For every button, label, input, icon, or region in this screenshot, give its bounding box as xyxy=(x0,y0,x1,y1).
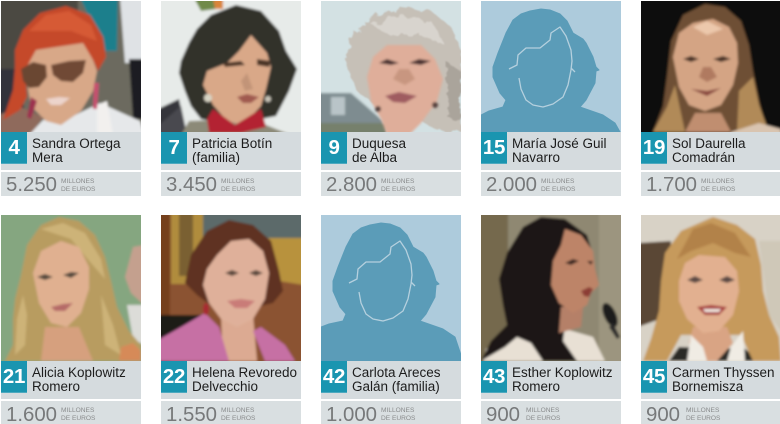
name: Romero xyxy=(32,379,80,394)
rank badge: 7 xyxy=(168,136,180,159)
fortune xyxy=(481,172,621,196)
name xyxy=(512,364,613,394)
fortune xyxy=(641,401,780,424)
photo: Esther Koplowitz xyxy=(481,215,621,361)
unit xyxy=(221,407,256,422)
unit: MILLONES xyxy=(686,407,719,414)
rank badge: 22 xyxy=(163,365,185,388)
name: Carmen Thyssen xyxy=(672,364,775,380)
card: María José Guil Navarro xyxy=(481,1,621,196)
card: Sandra Ortega Mera xyxy=(1,1,141,196)
card: Esther Koplowitz Romero xyxy=(481,215,621,424)
rank badge: 4 xyxy=(8,136,20,159)
fortune xyxy=(1,172,141,196)
unit xyxy=(61,407,96,422)
unit xyxy=(61,178,96,193)
amount: 2.800 xyxy=(326,174,377,196)
unit: DE EUROS xyxy=(701,186,735,193)
name: Romero xyxy=(512,379,560,394)
photo: Alicia Koplowitz xyxy=(1,215,141,361)
name band xyxy=(161,361,301,399)
unit: DE EUROS xyxy=(61,186,95,193)
unit: MILLONES xyxy=(61,178,94,185)
unit xyxy=(526,407,560,422)
name xyxy=(192,364,297,394)
name band xyxy=(1,361,141,399)
name: Esther Koplowitz xyxy=(512,364,613,380)
unit xyxy=(221,178,256,193)
name: Mera xyxy=(32,150,63,165)
rank badge: 42 xyxy=(323,365,345,388)
rank badge: 19 xyxy=(643,136,665,159)
unit: MILLONES xyxy=(221,178,254,185)
photo: Sandra Ortega xyxy=(1,1,141,132)
rank badge xyxy=(641,132,667,164)
rank badge: 43 xyxy=(483,365,505,388)
rank badge xyxy=(321,132,347,164)
photo: Sol Daurella xyxy=(641,1,780,132)
name xyxy=(32,364,126,394)
unit: DE EUROS xyxy=(221,186,255,193)
rank badge: 45 xyxy=(643,365,665,388)
name band xyxy=(1,132,141,170)
unit: DE EUROS xyxy=(686,415,720,422)
photo: Duquesa de Alba xyxy=(321,1,461,132)
unit xyxy=(381,178,416,193)
name band xyxy=(321,361,461,399)
card: Carlota Areces Galán xyxy=(321,215,461,424)
name xyxy=(32,136,121,165)
name xyxy=(352,364,441,394)
name: (familia) xyxy=(192,150,240,165)
name: Alicia Koplowitz xyxy=(32,364,126,380)
card: Carmen Thyssen Bornemisza xyxy=(641,215,780,424)
fortune xyxy=(1,401,141,424)
unit xyxy=(541,178,576,193)
unit: MILLONES xyxy=(221,407,254,414)
name: Comadrán xyxy=(672,150,735,165)
unit: MILLONES xyxy=(526,407,559,414)
amount: 3.450 xyxy=(166,174,217,196)
rank badge xyxy=(1,361,27,393)
unit xyxy=(701,178,736,193)
name: de Alba xyxy=(352,150,397,165)
name: Carlota Areces xyxy=(352,364,441,380)
name xyxy=(192,136,272,165)
fortune xyxy=(161,401,301,424)
amount: 5.250 xyxy=(6,174,57,196)
unit: MILLONES xyxy=(381,407,414,414)
name: Helena Revoredo xyxy=(192,364,297,380)
unit: DE EUROS xyxy=(526,415,560,422)
name band xyxy=(641,132,780,170)
unit: DE EUROS xyxy=(221,415,255,422)
name xyxy=(512,136,607,165)
amount: 1.700 xyxy=(646,174,697,196)
fortune xyxy=(161,172,301,196)
unit: DE EUROS xyxy=(61,415,95,422)
photo: Patricia Botín xyxy=(161,1,301,132)
name band xyxy=(641,361,780,399)
rank badge xyxy=(321,361,347,393)
rank badge xyxy=(161,361,187,393)
icon: anonymous silhouette xyxy=(481,1,621,132)
fortune xyxy=(481,401,621,424)
rank badge xyxy=(1,132,27,164)
name: Sol Daurella xyxy=(672,136,746,150)
name: Sandra Ortega xyxy=(32,136,121,150)
unit: DE EUROS xyxy=(541,186,575,193)
amount: 2.000 xyxy=(486,174,537,196)
name: Galán (familia) xyxy=(352,379,440,394)
photo: Carmen Thyssen xyxy=(641,215,780,361)
name: Patricia Botín xyxy=(192,136,272,150)
name band xyxy=(161,132,301,170)
fortune xyxy=(321,401,461,424)
unit: MILLONES xyxy=(381,178,414,185)
name xyxy=(672,364,775,394)
rank badge: 15 xyxy=(483,136,505,159)
card: Patricia Botín xyxy=(161,1,301,196)
rank badge xyxy=(641,361,667,393)
card: Duquesa de Alba xyxy=(321,1,461,196)
name: María José Guil xyxy=(512,136,607,150)
name band xyxy=(481,132,621,170)
unit: MILLONES xyxy=(701,178,734,185)
card: Helena Revoredo Delvecchio xyxy=(161,215,301,424)
unit xyxy=(686,407,720,422)
rank badge xyxy=(161,132,187,164)
name band xyxy=(321,132,461,170)
unit: MILLONES xyxy=(541,178,574,185)
card: Alicia Koplowitz Romero xyxy=(1,215,141,424)
rank badge xyxy=(481,132,507,164)
name: Navarro xyxy=(512,150,560,165)
icon: anonymous silhouette xyxy=(321,215,461,361)
name: Delvecchio xyxy=(192,379,258,394)
card: Sol Daurella Comadrán xyxy=(641,1,780,196)
unit: MILLONES xyxy=(61,407,94,414)
unit xyxy=(381,407,416,422)
fortune xyxy=(641,172,780,196)
rank badge xyxy=(481,361,507,393)
name: Bornemisza xyxy=(672,379,743,394)
name band xyxy=(481,361,621,399)
name: Duquesa xyxy=(352,136,406,150)
name xyxy=(672,136,746,165)
photo: Helena Revoredo xyxy=(161,215,301,361)
unit: DE EUROS xyxy=(381,186,415,193)
unit: DE EUROS xyxy=(381,415,415,422)
rank badge: 21 xyxy=(3,365,25,388)
name xyxy=(352,136,406,165)
fortune xyxy=(321,172,461,196)
rank badge: 9 xyxy=(328,136,340,159)
